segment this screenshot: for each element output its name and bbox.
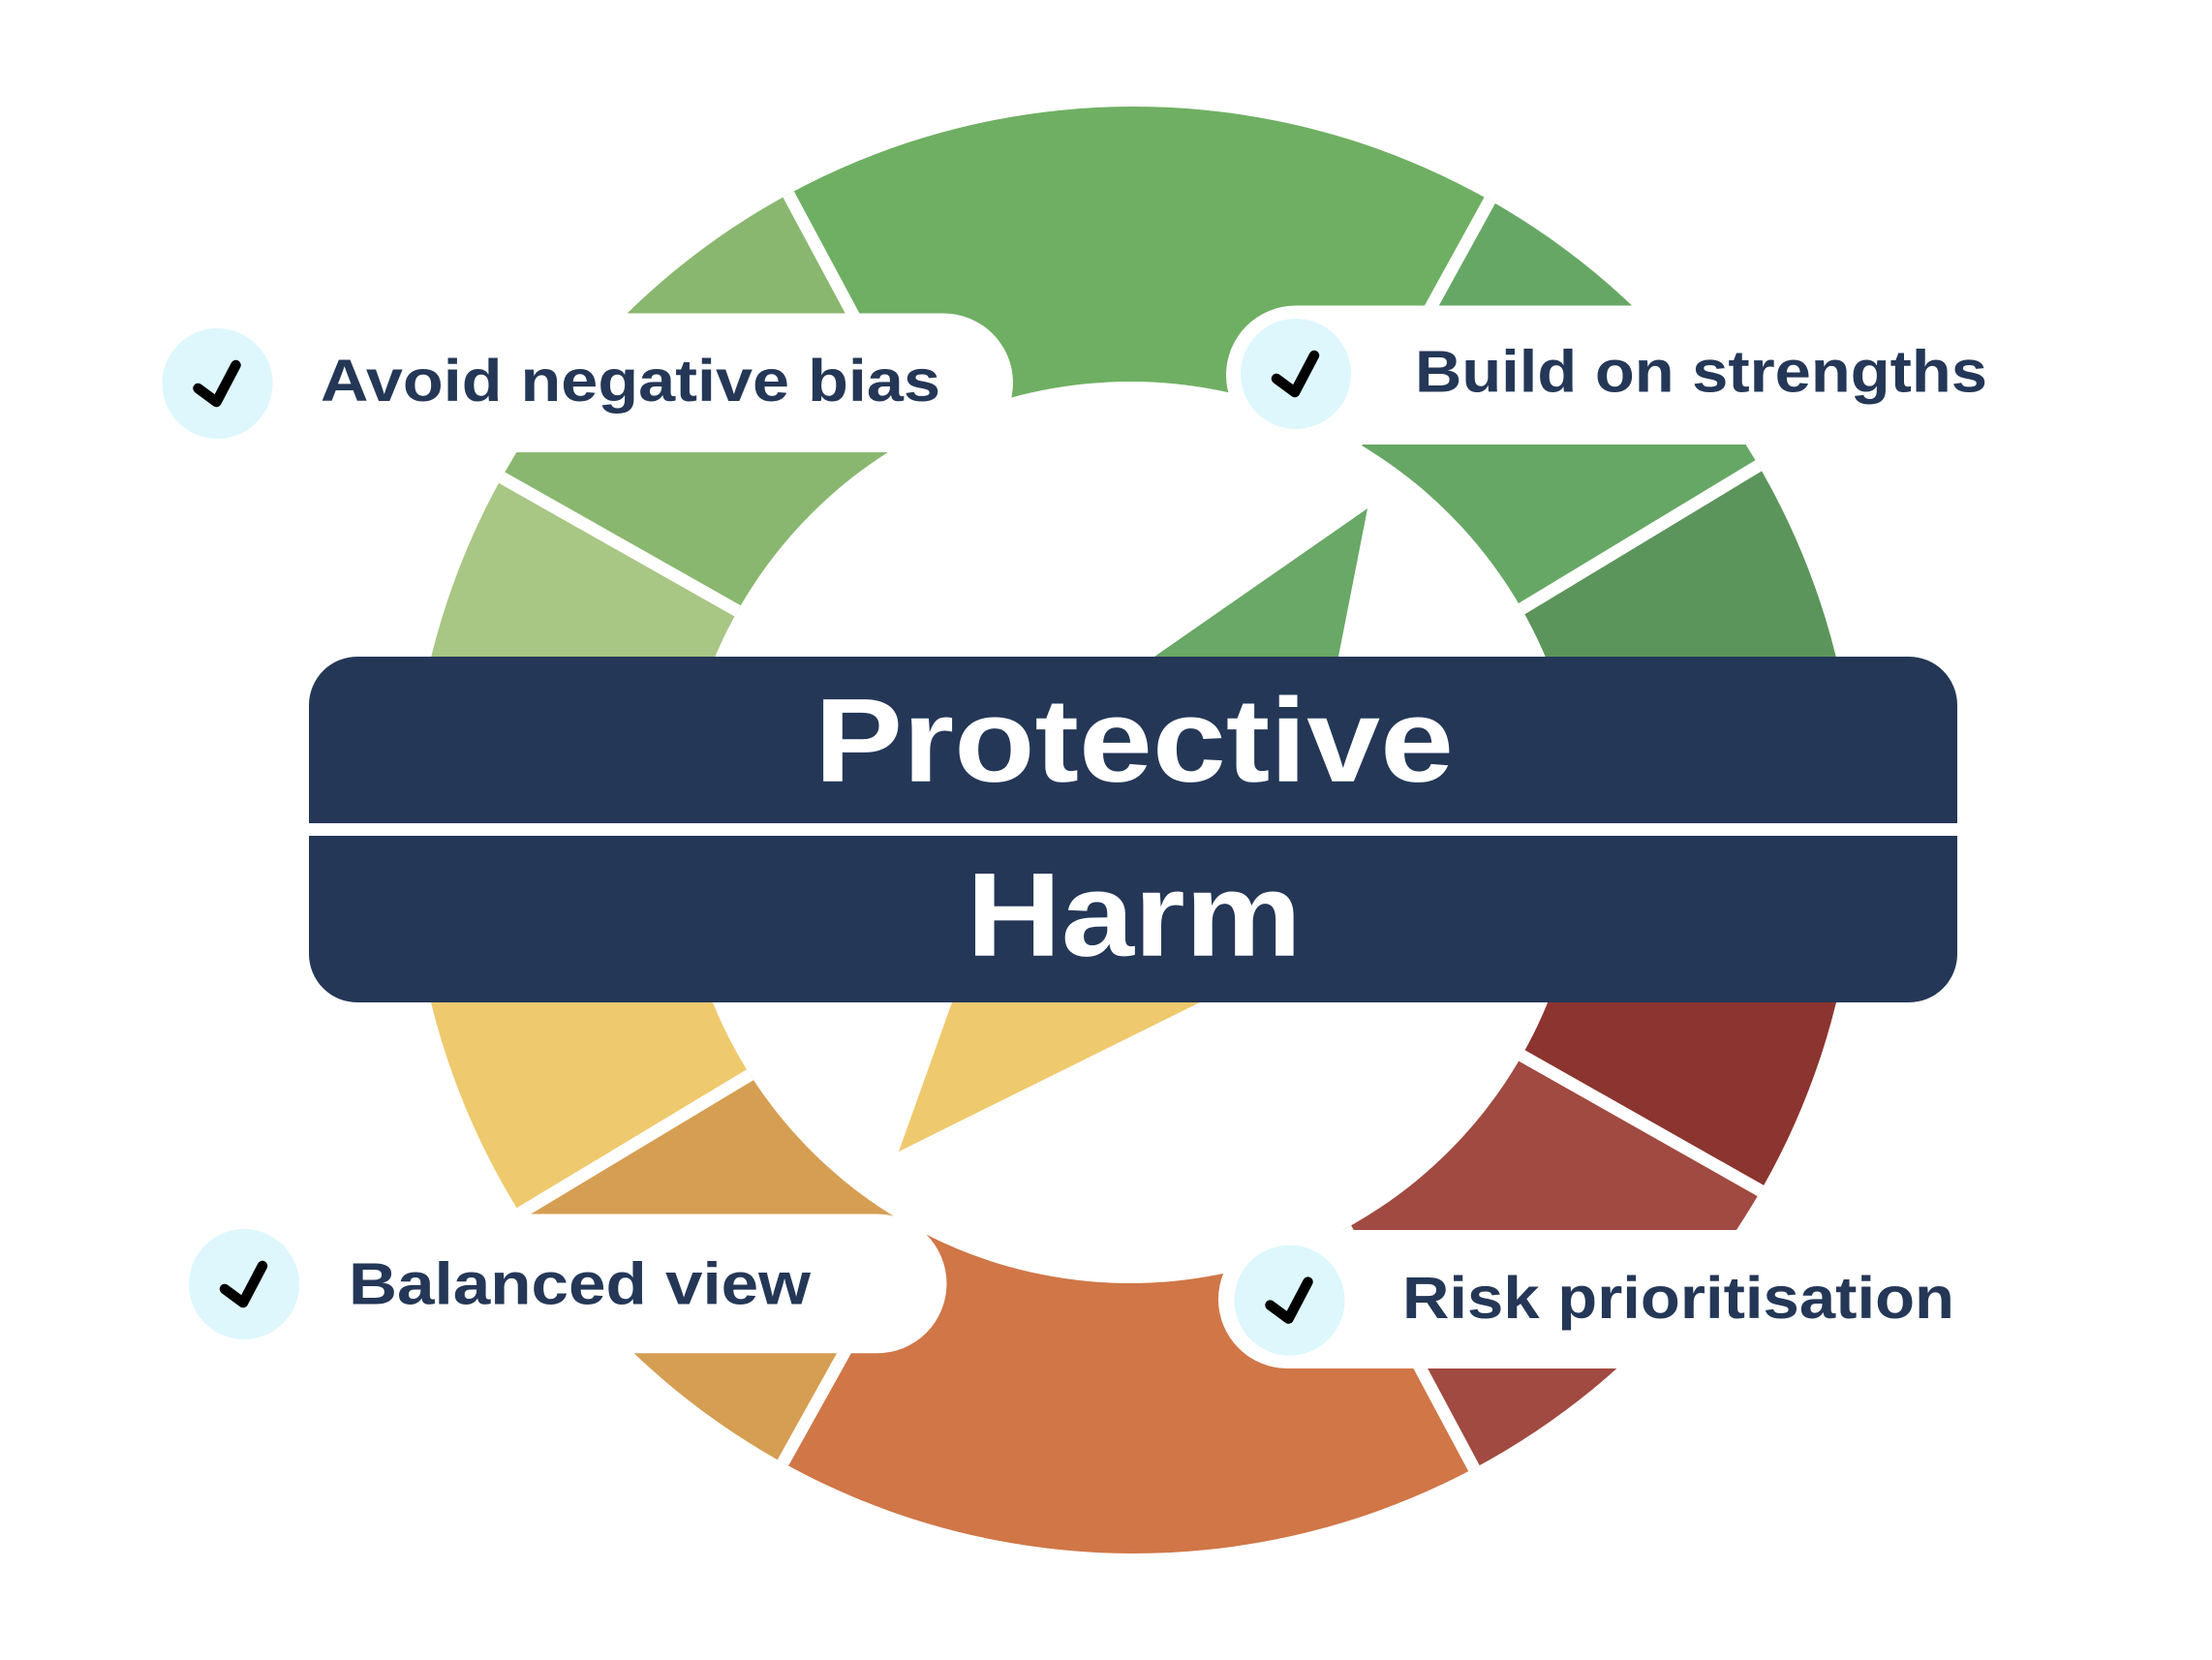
icon: check circle (163, 328, 273, 439)
heading: protective: Protective (814, 675, 1454, 808)
band: harm (309, 836, 1957, 1002)
icon: check circle (1234, 1245, 1344, 1356)
segment: bottom orange (783, 1228, 1474, 1553)
segment: top green (788, 107, 1490, 397)
label: avoid negative bias (145, 314, 1013, 452)
text: balanced view: Balanced view (349, 1251, 812, 1317)
segment: upper left green (502, 194, 888, 611)
segment dividers (499, 192, 1765, 1471)
label: build on strengths (1226, 306, 2049, 445)
label: risk prioritisation (1218, 1230, 2042, 1368)
segment: right dark red (1522, 1002, 1836, 1191)
heading: harm: Harm (967, 849, 1302, 982)
segment: lower right red (1346, 1056, 1761, 1468)
segment: right dark green (1521, 465, 1836, 657)
text: avoid negative bias: Avoid negative bias (321, 348, 940, 414)
icon: check circle (1241, 319, 1351, 429)
icon: check circle (189, 1229, 299, 1339)
segment: left yellow (431, 1002, 750, 1213)
segment: left light green (431, 478, 738, 657)
band: protective (309, 657, 1957, 823)
text: build on strengths: Build on strengths (1415, 339, 1987, 405)
needle: green upper triangle (1154, 508, 1367, 657)
segment: lower left tan (520, 1075, 894, 1462)
label: balanced view (145, 1214, 947, 1353)
infographic: protective harm wheel (163, 107, 1985, 1553)
segment: upper right green (1360, 200, 1759, 608)
text: risk prioritisation: Risk prioritisation (1402, 1265, 1954, 1331)
needle: yellow lower triangle (899, 1002, 1200, 1152)
ring: coloured gauge segments (309, 48, 1957, 1598)
